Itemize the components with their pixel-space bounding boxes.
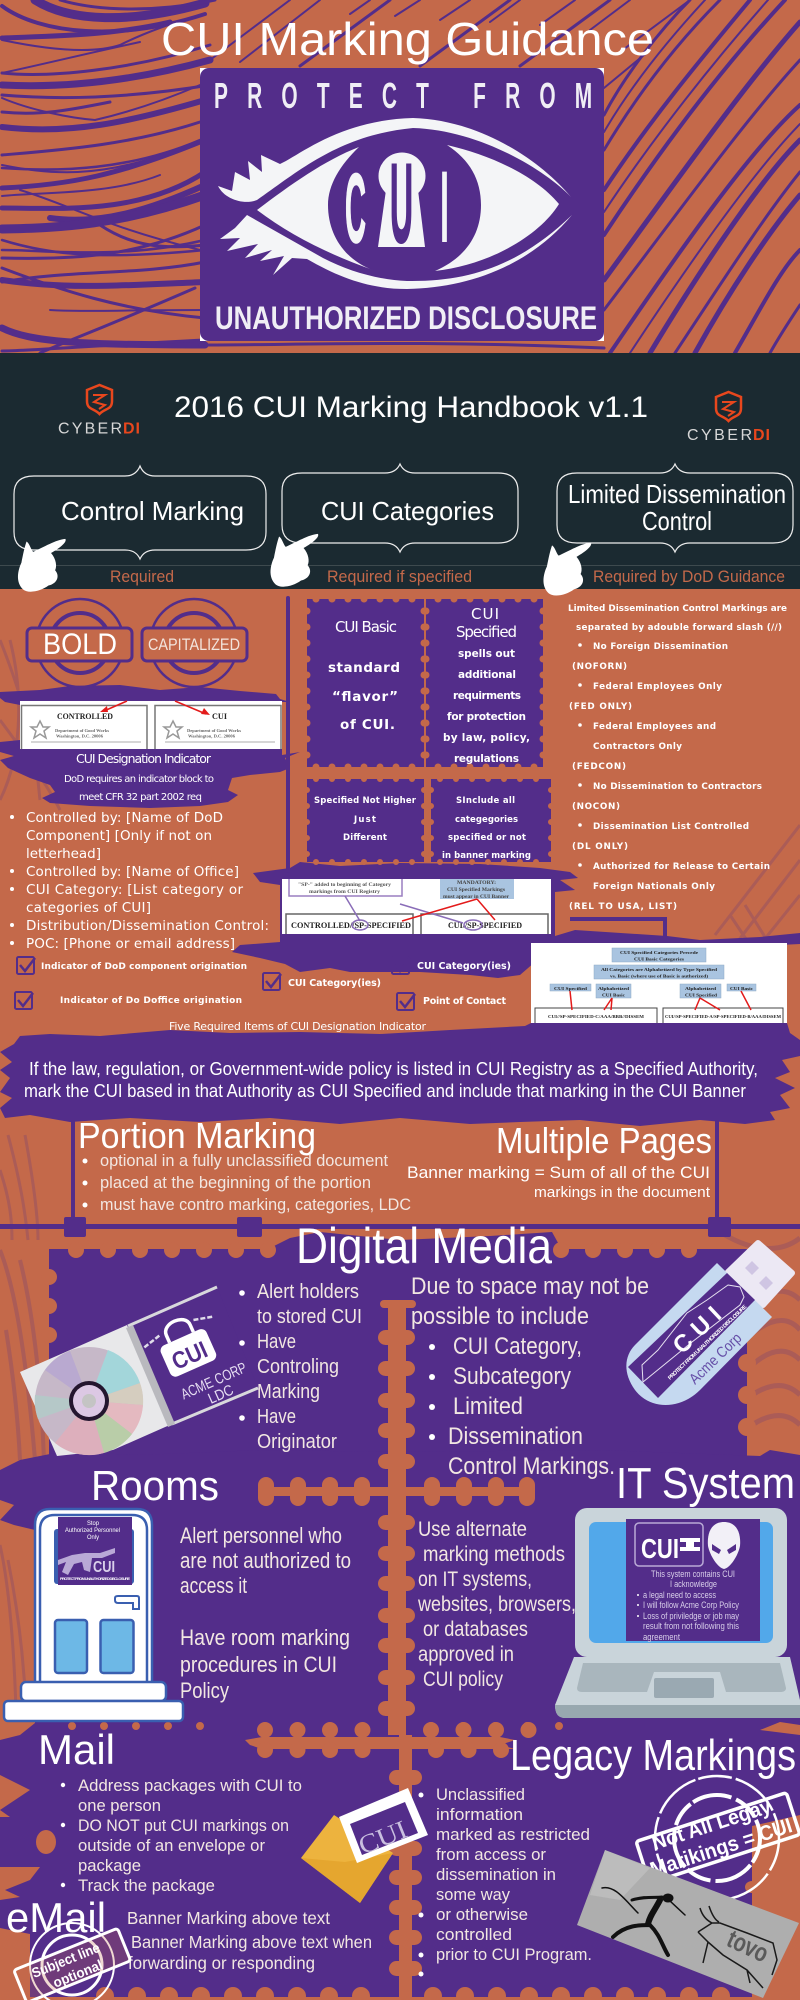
list: limited dissemination control markings: (NOFORN): [572, 662, 627, 672]
icon: envelope with cui card: CUI: [354, 1815, 411, 1860]
list: limited dissemination control markings: Contractors Only: [593, 742, 682, 752]
stamp: not all legacy markings: Not All Legay: [649, 1795, 774, 1855]
connector lines and nodes: [0, 1115, 800, 1237]
list: mail guidance: DO NOT put CUI markings on: [78, 1817, 289, 1835]
connector line: [570, 919, 665, 943]
divider line: [286, 596, 290, 873]
panel: include all categories: SInclude all: [456, 796, 515, 806]
heading: email: eMail: [6, 1894, 106, 1941]
label: required by dod guidance: Required by DoD Guidance: [593, 567, 785, 586]
panel: cui specified: [426, 599, 543, 767]
dark band: [0, 353, 800, 589]
header background: woven purple strands: [2, 0, 800, 353]
banner screen: [626, 1519, 760, 1642]
list: digital media holders: Have: [257, 1406, 296, 1428]
banner screen: I will follow Acme Corp Policy: [643, 1600, 739, 1610]
image: sp marking example: markings from CUI Registry: [309, 889, 380, 895]
acme corp label: LDC: [206, 1381, 236, 1408]
brush: specified backdrop: [232, 862, 800, 978]
acme corp label: ACME CORP: [178, 1359, 249, 1403]
panel: cui basic: of CUI.: [340, 717, 395, 733]
check: dod office: Indicator of Do Doffice origination: [60, 996, 242, 1006]
brush: bottom band: [0, 1023, 800, 1126]
image: sp marking example: must appear in CUI Banner: [443, 895, 510, 900]
text: digital media space note: Control Markings.: [448, 1453, 615, 1480]
heading: mail: Mail: [38, 1726, 115, 1773]
text: email guidance: Banner Marking above text when: [131, 1932, 372, 1952]
list: legacy markings: dissemination in: [436, 1865, 556, 1884]
stamp: subject line optional: optional: [50, 1956, 105, 1991]
image: sp marking example: CUI//SP-SPECIFIED: [448, 921, 522, 930]
image: cui designation indicator examples: Washington, D.C. 20006: [56, 734, 104, 738]
icon: cd case: [20, 1287, 258, 1456]
heading: portion marking: Portion Marking: [78, 1115, 316, 1156]
check: cui category second: [392, 957, 511, 974]
image: category ordering diagram: CUI Basic Categories: [634, 956, 684, 962]
faint background swirls: [0, 640, 800, 1710]
panel: cui basic: CUI Basic: [335, 618, 397, 636]
text: rooms guidance: Have room marking: [180, 1625, 350, 1650]
image: sp marking example: [282, 879, 551, 934]
panel: cui specified: spells out: [458, 648, 515, 660]
list: designation indicator fields: POC: [Phone or email address]: [26, 936, 235, 952]
callout: specified authority: [24, 1058, 758, 1101]
image: cui designation indicator examples: [20, 701, 282, 749]
panel: include all categories: specified or not: [448, 833, 526, 843]
text: it system guidance: CUI policy: [423, 1668, 503, 1691]
panel: specified not higher: [307, 779, 424, 862]
purple lower background: [0, 1450, 800, 2000]
caption: five required items: Five Required Items of CUI Designation Indicator: [169, 1020, 426, 1033]
cave figure bull: [698, 1906, 777, 1988]
panel: cui specified: Specified: [456, 623, 517, 641]
list: limited dissemination control markings: (REL TO USA, LIST): [569, 902, 677, 912]
list: digital media holders: Originator: [257, 1431, 337, 1453]
logo: cyberdi right: CYBER: [687, 427, 752, 444]
image: cui designation indicator examples: CUI: [212, 712, 227, 721]
image: sp marking example: MANDATORY:: [457, 881, 496, 886]
text: it system guidance: or databases: [423, 1618, 528, 1641]
icon: door with cui sign: Only: [87, 1535, 99, 1541]
callout: specified authority: If the law, regulation, or Government-wide policy is listed in CUI Registry as a Specified Authority,: [29, 1058, 758, 1079]
list: designation indicator fields: Distribution/Dissemination Control:: [26, 918, 269, 934]
banner screen: CUI: [641, 1533, 679, 1564]
image: sp marking example: "SP-" added to beginning of Category: [298, 882, 391, 888]
lock label: [140, 1306, 230, 1384]
label: required if specified: Required if specified: [327, 567, 472, 586]
list: limited dissemination control markings: (FED ONLY): [569, 702, 632, 712]
list: designation indicator fields: CUI Category: [List category or: [26, 882, 243, 898]
list: portion marking: [82, 1151, 411, 1214]
stamp: subject line optional: [14, 1923, 131, 2000]
checklist: five required items: [15, 957, 511, 1010]
image: category ordering diagram: Alphabetized: [598, 986, 630, 991]
list: digital media holders: to stored CUI: [257, 1306, 362, 1328]
list: portion marking: must have contro marking, categories, LDC: [100, 1195, 411, 1214]
required element: limited dissemination control: Control: [642, 506, 712, 536]
panel: specified not higher: Different: [343, 833, 387, 843]
list: portion marking: placed at the beginning of the portion: [100, 1173, 371, 1192]
panel: specified not higher: Specified Not Higher: [314, 796, 417, 806]
cave figure hunter: [602, 1888, 685, 1955]
icon: eye with keyhole: [218, 118, 572, 289]
panel: include all categories: categegories: [455, 815, 518, 825]
icon: capitalized stamp: CAPITALIZED: [148, 635, 240, 654]
list: mail guidance: package: [78, 1857, 141, 1875]
caption: cui designation indicator: CUI Designation Indicator: [76, 751, 212, 766]
list: limited dissemination control markings: (FEDCON): [572, 762, 626, 772]
list: limited dissemination control markings: Federal Employees and: [593, 722, 716, 732]
icon: usb drive: [626, 1243, 792, 1405]
stamp: not all legacy markings: [635, 1776, 800, 1900]
heading: multiple pages: Multiple Pages: [496, 1120, 712, 1161]
panel: cui basic: “flavor”: [332, 689, 398, 705]
banner screen: a legal need to access: [643, 1590, 716, 1600]
icon: bold stamp: BOLD: [43, 628, 117, 661]
icon: pointing hand 3: [543, 543, 591, 596]
required element: control marking: Control Marking: [61, 496, 244, 526]
list: mail guidance: one person: [78, 1797, 161, 1815]
list: legacy markings: marked as restricted: [436, 1825, 590, 1844]
check: dod component: [17, 957, 247, 974]
icon: capitalized stamp: [142, 599, 247, 687]
list: digital media holders: Marking: [257, 1381, 320, 1403]
image: category ordering diagram: CUI//SP-SPECIFIED-A/SP-SPECIFIED-B/AAA/DISSEM: [665, 1014, 781, 1019]
required element: control marking: [14, 466, 266, 559]
image: category ordering diagram: CUI Specified: [554, 986, 588, 991]
text: it system guidance: [417, 1518, 576, 1691]
list: digital media holders: Have: [257, 1331, 296, 1353]
text: digital media space note: Due to space may not be: [411, 1273, 649, 1300]
banner screen: I acknowledge: [670, 1579, 717, 1590]
icon: usb drive: CUI: [668, 1301, 727, 1359]
logo: cyberdi left: CYBER: [58, 420, 122, 438]
text: it system guidance: marking methods: [423, 1543, 565, 1566]
icon: pointing hand 2: [271, 534, 318, 587]
icon: laptop with cui banner: [555, 1508, 800, 1718]
stamp: subject line optional: Subject line: [29, 1939, 102, 1981]
list: designation indicator fields: Controlled by: [Name of DoD: [26, 810, 223, 826]
logo: cyberdi left: [58, 385, 140, 438]
list: limited dissemination control markings: (NOCON): [572, 802, 620, 812]
poster: protect from CUI unauthorized disclosure: UNAUTHORIZED DISCLOSURE: [215, 300, 597, 336]
list: limited dissemination control markings: Foreign Nationals Only: [593, 882, 715, 892]
cd disc: [35, 1347, 143, 1455]
logo: cyberdi left: DI: [123, 420, 140, 438]
text: it system guidance: Use alternate: [418, 1518, 527, 1541]
icon: door with cui sign: PROTECT FROM UNAUTHORIZED DISCLOSURE: [60, 1576, 130, 1581]
list: legacy markings: from access or: [436, 1845, 546, 1864]
list: mail guidance: Track the package: [78, 1877, 215, 1895]
list: legacy markings: controlled: [436, 1925, 512, 1944]
list: legacy markings: some way: [436, 1885, 510, 1904]
list: limited dissemination control markings: Federal Employees Only: [593, 682, 722, 692]
image: cui designation indicator examples: Department of Good Works: [55, 728, 109, 733]
image: category ordering diagram: [531, 943, 787, 1023]
icon: usb drive: PROTECT FROM UNAUTHORIZED DISCLOSURE: [667, 1304, 749, 1381]
image: cui designation indicator examples: Department of Good Works: [187, 728, 241, 733]
text: digital media space note: Dissemination: [448, 1423, 583, 1450]
list: mail guidance: [61, 1777, 302, 1895]
panel: specified not higher: Just: [353, 815, 376, 825]
list: limited dissemination control markings: (DL ONLY): [572, 842, 628, 852]
check: dod component: Indicator of DoD component origination: [41, 962, 247, 972]
text: digital media space note: Limited: [453, 1393, 523, 1420]
list: mail guidance: Address packages with CUI to: [78, 1777, 302, 1795]
image: category ordering diagram: vs. Basic (where use of Basic is authorized): [610, 974, 709, 978]
list: designation indicator fields: Controlled by: [Name of Office]: [26, 864, 239, 880]
list: legacy markings: prior to CUI Program.: [436, 1945, 592, 1964]
list: designation indicator fields: letterhead]: [26, 846, 101, 862]
check: point of contact: [397, 993, 506, 1010]
title: CUI Marking Guidance: [161, 13, 654, 65]
list: designation indicator fields: Component] [Only if not on: [26, 828, 212, 844]
poster: protect from CUI unauthorized disclosure: I: [440, 150, 449, 264]
text: digital media space note: [411, 1273, 649, 1480]
list: limited dissemination control markings: [568, 604, 787, 912]
icon: door with cui sign: Authorized Personnel: [65, 1528, 120, 1534]
image: category ordering diagram: Alphabetized: [685, 986, 717, 991]
banner screen: result from not following this: [643, 1621, 739, 1631]
banner screen: Loss of priviledge or job may: [643, 1611, 739, 1621]
text: email guidance: [127, 1908, 372, 1973]
text: email guidance: forwarding or responding: [128, 1953, 315, 1973]
label: required: Required: [110, 567, 174, 586]
caption: dod requirement: DoD requires an indicator block to: [64, 774, 214, 785]
icon: door with cui sign: CUI: [93, 1559, 115, 1576]
banner screen: agreement: [643, 1632, 680, 1642]
image: category ordering diagram: CUI Specified Categories Precede: [620, 950, 698, 955]
text: it system guidance: websites, browsers,: [417, 1593, 576, 1616]
brush: indicator backdrop: [0, 685, 300, 808]
icon: usb drive: Acme Corp: [686, 1330, 745, 1388]
list: limited dissemination control markings: separated by adouble forward slash (//): [576, 623, 782, 633]
panel: cui specified: additional: [458, 669, 516, 681]
text: email guidance: Banner Marking above text: [127, 1908, 330, 1928]
panel: cui specified: CUI: [471, 605, 499, 623]
logo: cyberdi right: [687, 392, 770, 444]
text: banner marking sum: Banner marking = Sum of all of the CUI: [407, 1163, 710, 1182]
banner screen: This system contains CUI: [651, 1569, 735, 1580]
eye letters: c u i: C: [345, 153, 366, 263]
text: digital media space note: CUI Category,: [453, 1333, 582, 1360]
heading: rooms: Rooms: [91, 1462, 219, 1509]
icon: door with cui sign: [4, 1509, 183, 1721]
panel: cui basic: [307, 599, 424, 767]
icon: bold stamp: [27, 599, 132, 687]
caption: dod requirement: [64, 774, 214, 803]
image: category ordering diagram: CUI Specified: [685, 992, 718, 998]
eye letters: c u i: U: [390, 141, 413, 266]
text: banner marking sum: markings in the document: [534, 1184, 711, 1201]
heading: digital media: Digital Media: [296, 1218, 552, 1274]
caption: dod requirement: meet CFR 32 part 2002 req: [79, 792, 202, 803]
list: limited dissemination control markings: Authorized for Release to Certain: [593, 862, 770, 872]
required element: cui categories: CUI Categories: [321, 496, 494, 526]
list: legacy markings: Unclassified: [436, 1785, 525, 1804]
icon: pointing hand 1: [18, 539, 66, 592]
text: digital media space note: Subcategory: [453, 1363, 571, 1390]
list: mail guidance: outside of an envelope or: [78, 1837, 266, 1855]
image: cave painting: [577, 1850, 799, 1998]
panel: cui basic: standard: [328, 660, 400, 676]
check: cui category: [263, 973, 381, 990]
text: rooms guidance: are not authorized to: [180, 1548, 351, 1573]
acme corp label: [178, 1359, 255, 1417]
panel: include all categories: in banner marking: [442, 851, 531, 861]
image: category ordering diagram: CUI Basic: [602, 992, 625, 998]
text: it system guidance: on IT systems,: [418, 1568, 532, 1591]
list: limited dissemination control markings: No Dissemination to Contractors: [593, 782, 762, 792]
callout: specified authority: mark the CUI based in that Authority as CUI Specified and include that marking in the CUI Banner: [24, 1080, 746, 1101]
list: legacy markings: [418, 1785, 592, 1976]
list: designation indicator fields: [10, 810, 269, 952]
panel: cui specified: for protection: [447, 711, 526, 723]
text: rooms guidance: procedures in CUI: [180, 1652, 337, 1677]
text: digital media space note: possible to include: [411, 1303, 589, 1330]
text: it system guidance: approved in: [418, 1643, 514, 1666]
list: limited dissemination control markings: Dissemination List Controlled: [593, 822, 749, 832]
lock label: CUI: [168, 1336, 212, 1376]
image: sp marking example: CONTROLLED//SP-SPECIFIED: [291, 921, 411, 930]
image: cave painting: tovo: [723, 1923, 773, 1968]
panel: cui specified: regulations: [454, 753, 519, 765]
icon: envelope with cui card: [301, 1788, 428, 1903]
list: digital media holders: Alert holders: [257, 1281, 359, 1303]
list: limited dissemination control markings: Limited Dissemination Control Markings are: [568, 604, 787, 614]
required element: limited dissemination control: [557, 464, 793, 552]
orange divider with beads: [0, 1300, 800, 2000]
check: cui category second: CUI Category(ies): [417, 961, 511, 972]
image: category ordering diagram: All Categories are Alphabetized by Type Specified: [601, 967, 718, 972]
check: dod office: [15, 992, 242, 1009]
icon: door with cui sign: Stop: [87, 1521, 100, 1527]
image: cui designation indicator examples: Washington, D.C. 20006: [188, 734, 236, 738]
panel: cui specified: by law, policy,: [443, 732, 530, 744]
handbook heading: 2016 CUI Marking Handbook v1.1: [174, 391, 648, 424]
image: category ordering diagram: CUI Basic: [730, 986, 753, 991]
text: rooms guidance: Alert personnel who: [180, 1523, 342, 1548]
image: sp marking example: CUI Specified Markings: [447, 888, 505, 893]
image: category ordering diagram: CUI//SP-SPECIFIED-C/AAA/BBB//DISSEM: [548, 1014, 644, 1019]
text: rooms guidance: access it: [180, 1573, 247, 1598]
list: limited dissemination control markings: No Foreign Dissemination: [593, 642, 728, 652]
logo: cyberdi right: DI: [753, 427, 770, 444]
poster: protect from CUI unauthorized disclosure: PROTECT FROM: [214, 76, 592, 117]
panel: cui specified: requirments: [453, 690, 521, 702]
list: portion marking: optional in a fully unclassified document: [100, 1151, 388, 1170]
eye letters: c u i: [345, 141, 449, 266]
list: digital media holders: [239, 1281, 362, 1453]
list: designation indicator fields: categories of CUI]: [26, 900, 151, 916]
panel: include all categories: [431, 779, 551, 862]
check: cui category: CUI Category(ies): [288, 978, 381, 989]
list: legacy markings: information: [436, 1805, 523, 1824]
image: cui designation indicator examples: CONTROLLED: [57, 712, 113, 721]
list: legacy markings: or otherwise: [436, 1905, 528, 1924]
text: rooms guidance: Policy: [180, 1678, 229, 1703]
panel: digital media background: [49, 1232, 747, 1490]
text: rooms guidance: [180, 1523, 351, 1703]
list: digital media holders: Controling: [257, 1356, 339, 1378]
poster: protect from CUI unauthorized disclosure: [200, 68, 604, 341]
text: banner marking sum: [407, 1163, 711, 1201]
required element: cui categories: [282, 464, 518, 552]
check: point of contact: Point of Contact: [423, 996, 506, 1007]
